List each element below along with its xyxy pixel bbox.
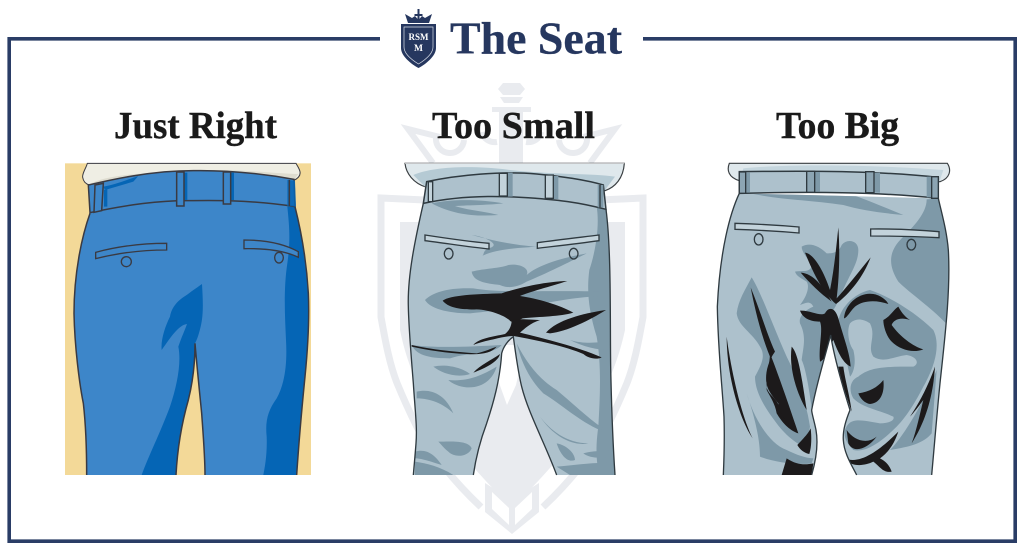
logo shield (401, 24, 436, 68)
dark folds (412, 281, 606, 373)
trouser outline (408, 203, 615, 475)
trouser shading (263, 207, 309, 475)
trouser base (717, 193, 949, 475)
logo crown (405, 9, 432, 23)
right pocket (537, 235, 599, 248)
trouser base (408, 190, 615, 475)
logo crest: RSM (408, 33, 429, 43)
heading: just right: Just Right (114, 105, 277, 147)
shirt (728, 163, 950, 182)
trouser legs (74, 187, 309, 475)
left pocket (735, 223, 799, 233)
waistband (423, 173, 606, 209)
heading: too big: Too Big (776, 105, 899, 147)
shirt (405, 163, 624, 191)
left pocket (96, 243, 167, 259)
belt loops (94, 172, 289, 212)
watermark crest (381, 83, 643, 534)
logo crest: M (414, 44, 423, 54)
waistband (739, 171, 938, 198)
panel: too big trousers (717, 163, 952, 475)
right pocket (244, 240, 298, 257)
waistband shade and belt loops (746, 172, 932, 197)
left pocket (425, 235, 489, 249)
panel: too small trousers (405, 163, 624, 475)
panel: just right trousers (65, 163, 311, 475)
panel background (65, 163, 311, 475)
trouser outline (717, 193, 949, 475)
logo crest (401, 9, 436, 68)
waistband shade and belt loops (507, 173, 603, 207)
fold shading (737, 194, 952, 464)
shirt (83, 163, 300, 185)
dark folds (727, 227, 935, 475)
title: The Seat (450, 14, 622, 64)
fold shading (412, 200, 617, 475)
trouser outline (74, 207, 309, 475)
waistband (88, 171, 295, 213)
heading: too small: Too Small (432, 105, 595, 147)
right pocket (871, 229, 939, 238)
